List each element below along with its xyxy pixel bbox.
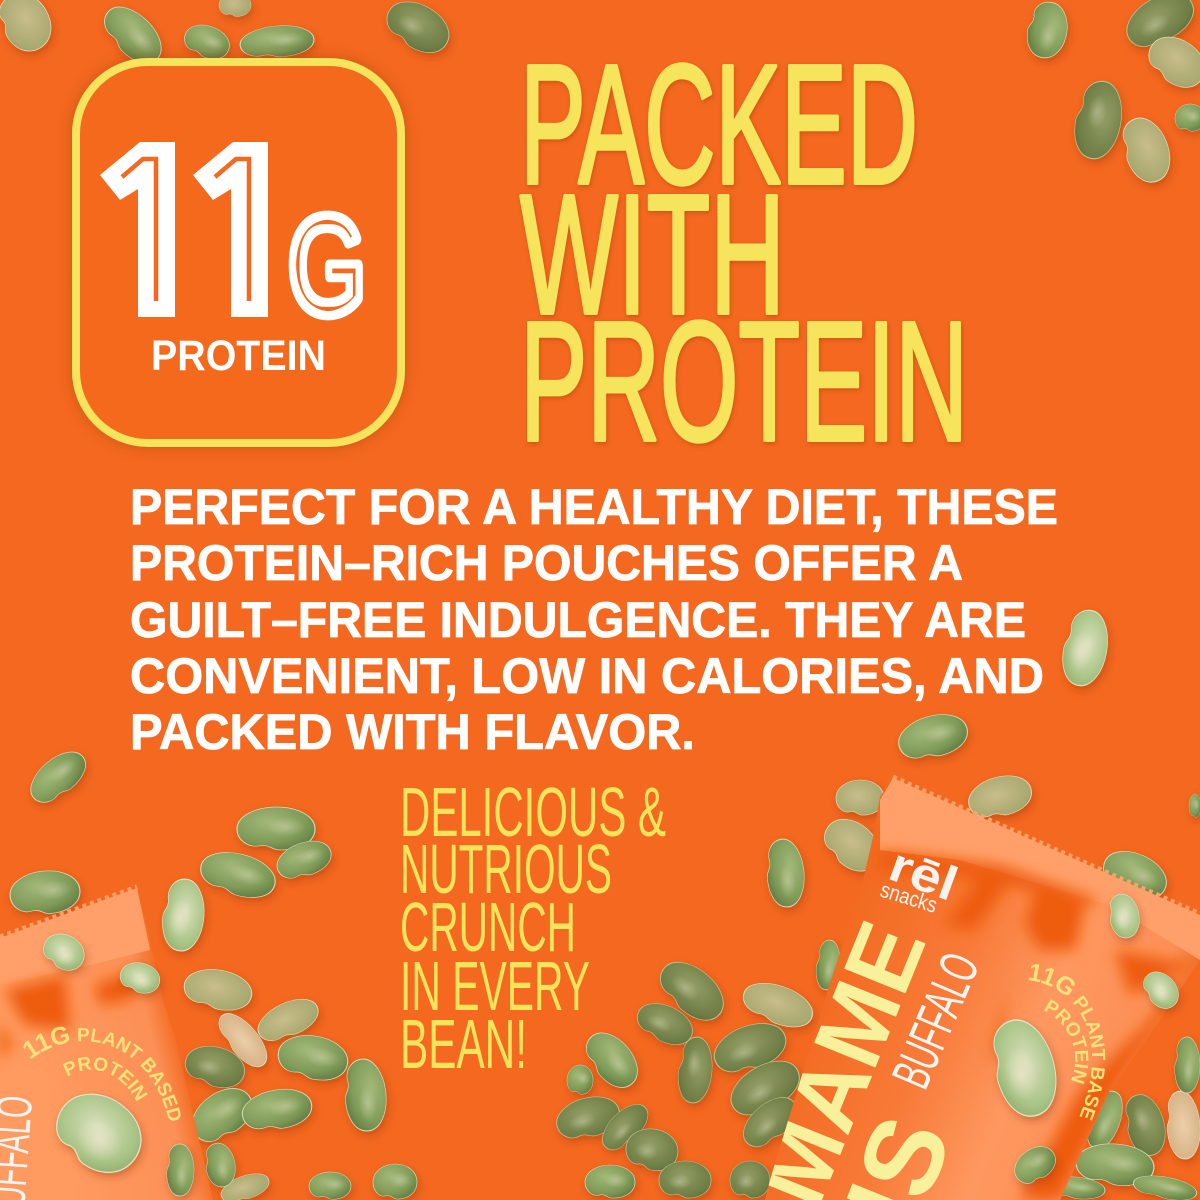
tagline: CRUNCH (400, 888, 576, 966)
packet claim: 11G PLANT BASED (23, 1026, 181, 1121)
badge figure: 11G: 1 (200, 96, 297, 386)
badge label: PROTEIN (151, 332, 326, 380)
headline (520, 30, 968, 477)
tagline (400, 773, 666, 1083)
tagline: IN EVERY (400, 947, 590, 1025)
body text: GUILT–FREE INDULGENCE. THEY ARE (130, 592, 1026, 648)
tagline: BEAN! (400, 1005, 527, 1083)
body text (130, 479, 1058, 760)
packet brand: rel snacks: snacks (878, 877, 940, 918)
packet brand: rel snacks: rēl (882, 839, 964, 912)
headline: WITH (520, 160, 785, 350)
packet claim: PROTEIN (1044, 999, 1088, 1084)
headline: PACKED (520, 30, 918, 220)
badge frame (76, 62, 401, 443)
tagline: DELICIOUS & (400, 773, 666, 851)
packet: left (0, 884, 213, 1200)
tagline: NUTRIOUS (400, 830, 612, 908)
badge figure: 11G: G (288, 189, 366, 343)
body text: PACKED WITH FLAVOR. (130, 704, 695, 760)
body text: PERFECT FOR A HEALTHY DIET, THESE (130, 479, 1058, 535)
packet flap highlight (0, 888, 150, 985)
packet claim: PROTEIN (62, 1057, 148, 1101)
packet claim (1028, 964, 1106, 1120)
packet flavor: BUFFALO (881, 944, 991, 1097)
packet brand: rel snacks (880, 855, 958, 912)
badge: 11g protein (76, 62, 401, 443)
packet creases (880, 850, 1190, 1200)
packet: right (765, 774, 1200, 1200)
badge figure: 11G: 1 (107, 96, 204, 386)
beans in front of packets (38, 892, 1185, 1196)
packet claim: 11G PLANT BASED (1028, 964, 1106, 1120)
badge figure: 11G: G (288, 189, 366, 343)
body text: CONVENIENT, LOW IN CALORIES, AND (130, 648, 1044, 704)
packet creases (0, 965, 150, 1060)
body text: PROTEIN–RICH POUCHES OFFER A (130, 535, 963, 591)
packet flap highlight (880, 778, 1200, 960)
badge figure: 11G (100, 142, 363, 320)
